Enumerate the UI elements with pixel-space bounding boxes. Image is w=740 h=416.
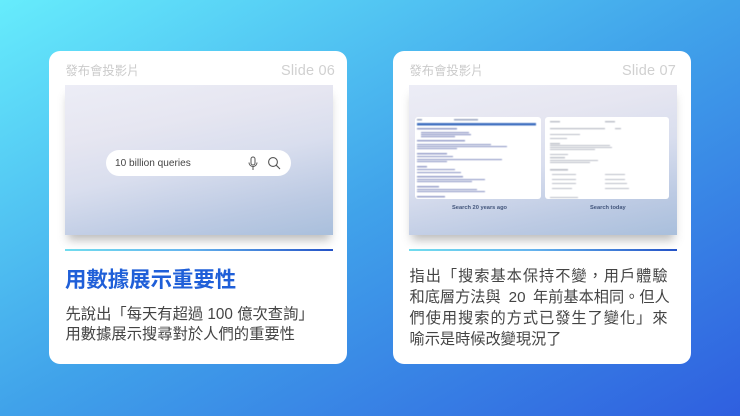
gradient divider [409,248,677,250]
panel: slide 07 card [393,51,691,364]
icon: microphone [248,156,258,170]
panel: slide 06 card [49,51,347,364]
label: launch slides: 發布會投影片 [66,64,139,78]
caption: search 20 years ago: Search 20 years ago [452,205,507,211]
description text: 20 [509,289,526,306]
slide image: search comparison [409,85,677,235]
description text [66,306,314,343]
label: launch slides: 發布會投影片 [410,64,483,78]
search bar [106,150,291,176]
caption: search today: Search today [590,205,626,211]
slide number 07: Slide 07 [622,63,676,79]
description text: 和底層方法與 年前基本相同。但人 [410,289,670,306]
description text: 用數據展示搜尋對於人們的重要性 [66,326,295,343]
description text: 喻示是時候改變現況了 [410,331,561,348]
gradient divider [65,248,333,250]
description text [410,268,670,348]
slide image: search bar [65,85,333,235]
description text: 先說出「每天有超過 100 億次查詢」 [66,306,314,323]
description text: 指出「搜索基本保持不變，用戶體驗 [410,268,668,284]
slide number 06: Slide 06 [281,63,335,79]
description text: 們使用搜索的方式已發生了變化」來 [410,310,668,327]
icon: magnifier [268,157,280,170]
screenshot: search 20 years ago [415,117,541,199]
search query text: 10 billion queries [115,158,191,169]
screenshot: search today [545,117,669,199]
heading: 用數據展示重要性 [65,268,236,292]
